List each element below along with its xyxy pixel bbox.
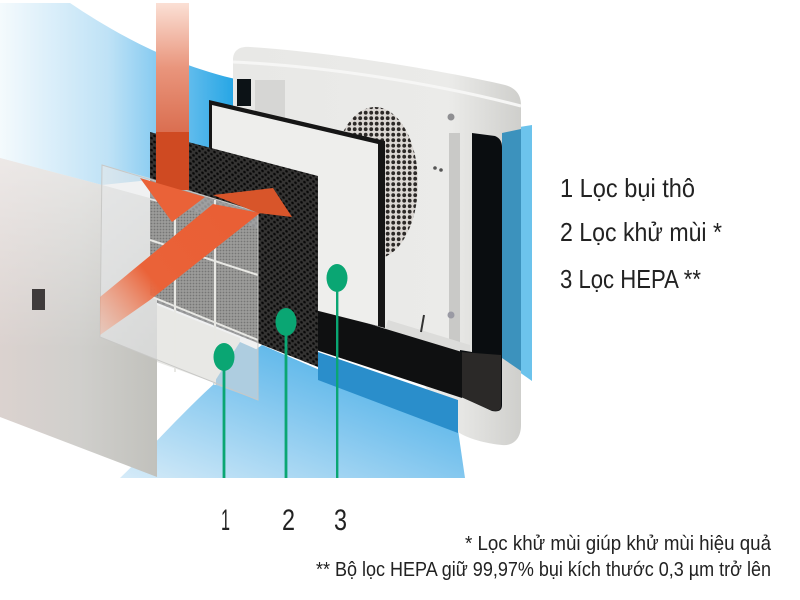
blue shadow below band <box>318 352 458 433</box>
blue airflow: top left <box>0 3 240 190</box>
panel: filter 2 carbon <box>150 132 318 367</box>
arrow: incoming air down <box>140 3 205 222</box>
panel: front cover <box>0 158 157 477</box>
number labels: 3 <box>334 504 347 537</box>
dark strip at top of body <box>237 79 251 106</box>
blue airflow: right <box>495 125 532 381</box>
number labels: 1 <box>221 504 230 537</box>
icon: front logo <box>32 289 45 310</box>
fan grill <box>332 107 418 259</box>
number labels: 2 <box>282 504 295 537</box>
arrow: purified air out <box>100 188 292 335</box>
purifier body <box>233 47 521 445</box>
footnotes <box>316 533 772 581</box>
footnotes: * Lọc khử mùi giúp khử mùi hiệu quả <box>465 533 772 555</box>
number labels <box>221 504 347 537</box>
pin 3 <box>326 264 348 478</box>
blue airflow: bottom <box>120 345 465 478</box>
legend text <box>560 173 722 294</box>
legend text: 2 Lọc khử mùi * <box>560 217 722 247</box>
black right strip <box>460 133 502 411</box>
black lower band <box>310 306 462 398</box>
blue overlay on body <box>502 129 521 371</box>
pin 1 <box>214 343 234 478</box>
panel: filter 3 HEPA <box>209 100 385 328</box>
pin 2 <box>276 308 296 478</box>
legend text: 1 Lọc bụi thô <box>560 173 695 203</box>
panel: filter 1 coarse mesh <box>100 165 258 400</box>
dark corner cap <box>461 352 501 411</box>
legend text: 3 Lọc HEPA ** <box>560 264 701 294</box>
